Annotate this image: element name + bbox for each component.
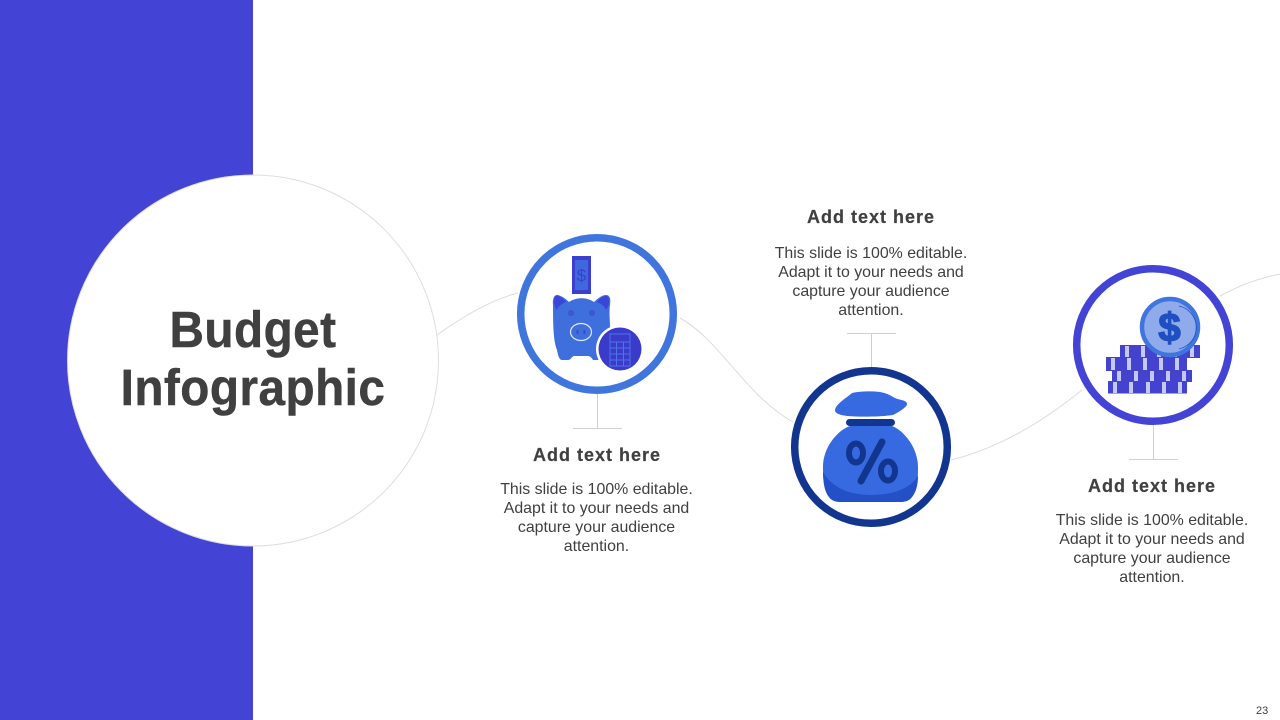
connector curves xyxy=(437,274,1280,460)
step 3 text: attention. xyxy=(1119,569,1185,586)
step 3 stem xyxy=(1129,425,1178,460)
bag body xyxy=(823,426,918,502)
step 2 text xyxy=(775,245,967,319)
title circle xyxy=(68,175,438,546)
dollar coin xyxy=(1142,299,1198,355)
step 3 text: capture your audience xyxy=(1073,550,1231,567)
percent sign xyxy=(849,442,895,481)
coin stacks xyxy=(1106,345,1200,394)
step 1 text: This slide is 100% editable. xyxy=(500,481,693,498)
page number: 23 xyxy=(1256,705,1268,717)
step 1 text: Adapt it to your needs and xyxy=(504,500,689,517)
step 1 heading: Add text here xyxy=(533,445,661,465)
step 3 text: This slide is 100% editable. xyxy=(1056,512,1248,529)
ring 1 xyxy=(521,238,673,390)
title xyxy=(121,301,385,416)
banknote xyxy=(572,256,591,294)
bag shadow xyxy=(823,472,918,502)
icon: piggy bank xyxy=(521,238,673,390)
bag top xyxy=(835,391,907,417)
title: Budget xyxy=(169,301,337,358)
step 1 text xyxy=(500,481,693,555)
title: Infographic xyxy=(121,359,385,416)
ring 2 xyxy=(795,371,947,523)
step 2 heading: Add text here xyxy=(807,207,935,227)
step 2 stem xyxy=(847,334,896,368)
left colour band xyxy=(0,0,253,720)
icon: money bag xyxy=(795,371,947,523)
step 3 heading: Add text here xyxy=(1088,476,1216,496)
step 1 text: attention. xyxy=(564,538,629,555)
icon: coins xyxy=(1077,269,1229,421)
step 2 text: This slide is 100% editable. xyxy=(775,245,967,262)
ring 3 xyxy=(1077,269,1229,421)
step 1 text: capture your audience xyxy=(518,519,675,536)
calculator badge xyxy=(596,325,644,373)
step 2 text: Adapt it to your needs and xyxy=(778,264,964,281)
step 2 text: attention. xyxy=(838,302,904,319)
step 1 stem xyxy=(573,394,622,428)
step 3 text: Adapt it to your needs and xyxy=(1059,531,1245,548)
step 3 text xyxy=(1056,512,1248,586)
step 2 text: capture your audience xyxy=(792,283,950,300)
bag band xyxy=(846,419,895,426)
dollar coin: $ xyxy=(1158,306,1181,350)
pig body xyxy=(553,295,610,360)
banknote: $ xyxy=(577,266,587,285)
